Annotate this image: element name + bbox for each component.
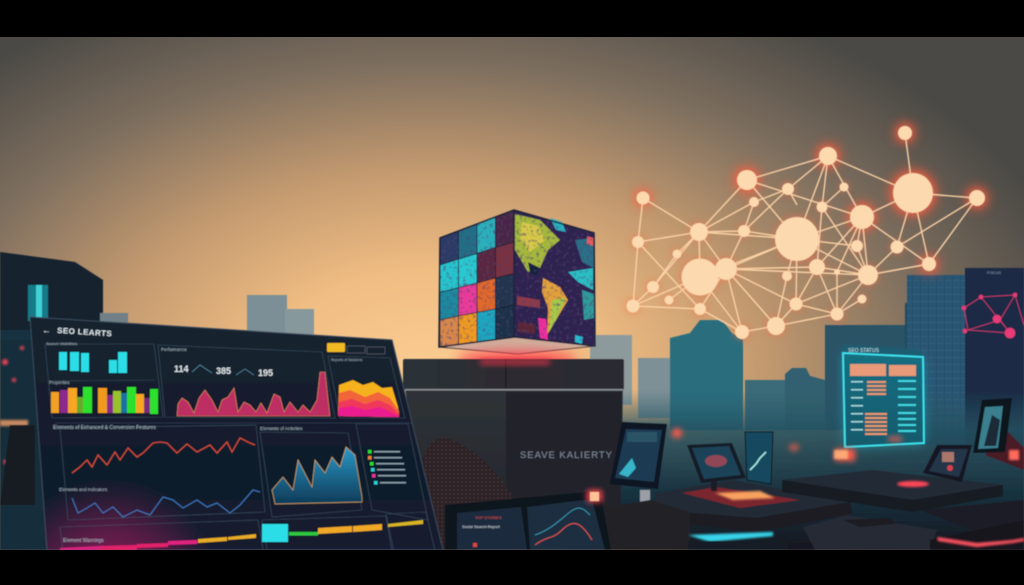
multicolour bar chart [51,387,158,414]
panel headings: Elements of Activities [260,426,303,431]
red sparks on left tower [0,346,28,464]
network nodes [626,126,985,339]
stacked area chart [338,380,399,417]
key metric numbers [174,364,273,378]
floating data cube [439,210,595,354]
cube underside [439,337,595,354]
dashboard title: SEO LEARTS [57,326,113,338]
pedestal body [404,390,624,486]
holographic data screen [843,345,924,447]
spike chart [177,372,330,416]
cube left face [440,210,514,347]
screen rows [865,381,887,435]
cyan light strip [688,532,773,542]
panel headings: Performance [161,347,187,352]
panel dividers [45,344,436,560]
dashboard frame [30,317,443,550]
rear building label: FOCUS [987,270,1001,275]
left ground haze [0,459,47,550]
red lights behind desks [672,428,902,461]
pedestal box [402,343,624,508]
cyan bar chart [59,352,127,373]
panel headings: Element Warnings [63,538,104,544]
glowing pad [682,487,800,508]
desk: left platform [655,480,852,532]
distant city skyline [0,252,1024,460]
left towers [0,252,103,345]
tablet with map [687,443,746,491]
metric sparklines [192,365,254,375]
laptop right screen [527,499,605,550]
panel headings: Elements of Enhanced & Conversion Features [53,425,156,431]
bottom status bars [60,520,423,550]
mesh dome [419,437,522,550]
key metric numbers: 195 [258,368,273,378]
blue line chart [72,490,260,517]
pedestal red top glint [480,359,550,365]
key metric numbers: 114 [174,364,189,374]
network graph [626,123,988,339]
pedestal label: SEAVE KALIERTY [520,450,613,461]
node glow [626,126,985,339]
bright light block [834,450,848,459]
desk red light [897,481,929,487]
red indicator light [587,490,602,502]
tablet on stand [610,422,667,514]
panel headings: Properties [49,380,70,385]
screen orange headers [850,364,886,376]
foreground laptop [445,490,611,550]
upright tablet [973,398,1024,470]
laptop left screen [457,507,527,550]
foreground laptop: Social Search Report [462,524,501,529]
panel headings: Elements and Indicators [59,487,108,492]
laptop on right desk [923,445,972,482]
foreground laptop: TOP STORIES [475,515,502,520]
desk: right platform [782,470,1003,512]
far right city network accent [962,293,1024,338]
panel headings: Reports of Sessions [331,358,363,362]
tablet with chart [745,432,773,484]
dashboard monitor [30,317,443,560]
key metric numbers: 385 [216,366,231,376]
desk: lower right [803,500,1024,550]
panel headings [46,341,363,544]
desk below tablet [601,500,690,550]
screen body [843,353,924,447]
red trend line chart [72,438,255,473]
scene artwork [0,123,1024,560]
teal ground haze [620,392,1024,550]
screen glow [843,353,924,447]
red glow on pedestal [457,351,577,369]
cube surface speckle [439,210,595,347]
cube right face: world map [514,210,595,346]
pedestal lid [403,359,624,390]
dashboard back arrow: ← [42,325,51,335]
time range tabs [327,343,385,354]
side list [368,450,406,484]
panel headings: Search Visibilities [46,341,77,346]
background monitor behind dashboard [0,425,35,505]
screen header [844,346,922,356]
holographic data screen: SEO STATUS [848,348,880,354]
strong glow on upper nodes [635,123,988,273]
red light strip [937,537,1024,547]
network links [633,133,977,332]
blue peak area chart [272,447,362,504]
